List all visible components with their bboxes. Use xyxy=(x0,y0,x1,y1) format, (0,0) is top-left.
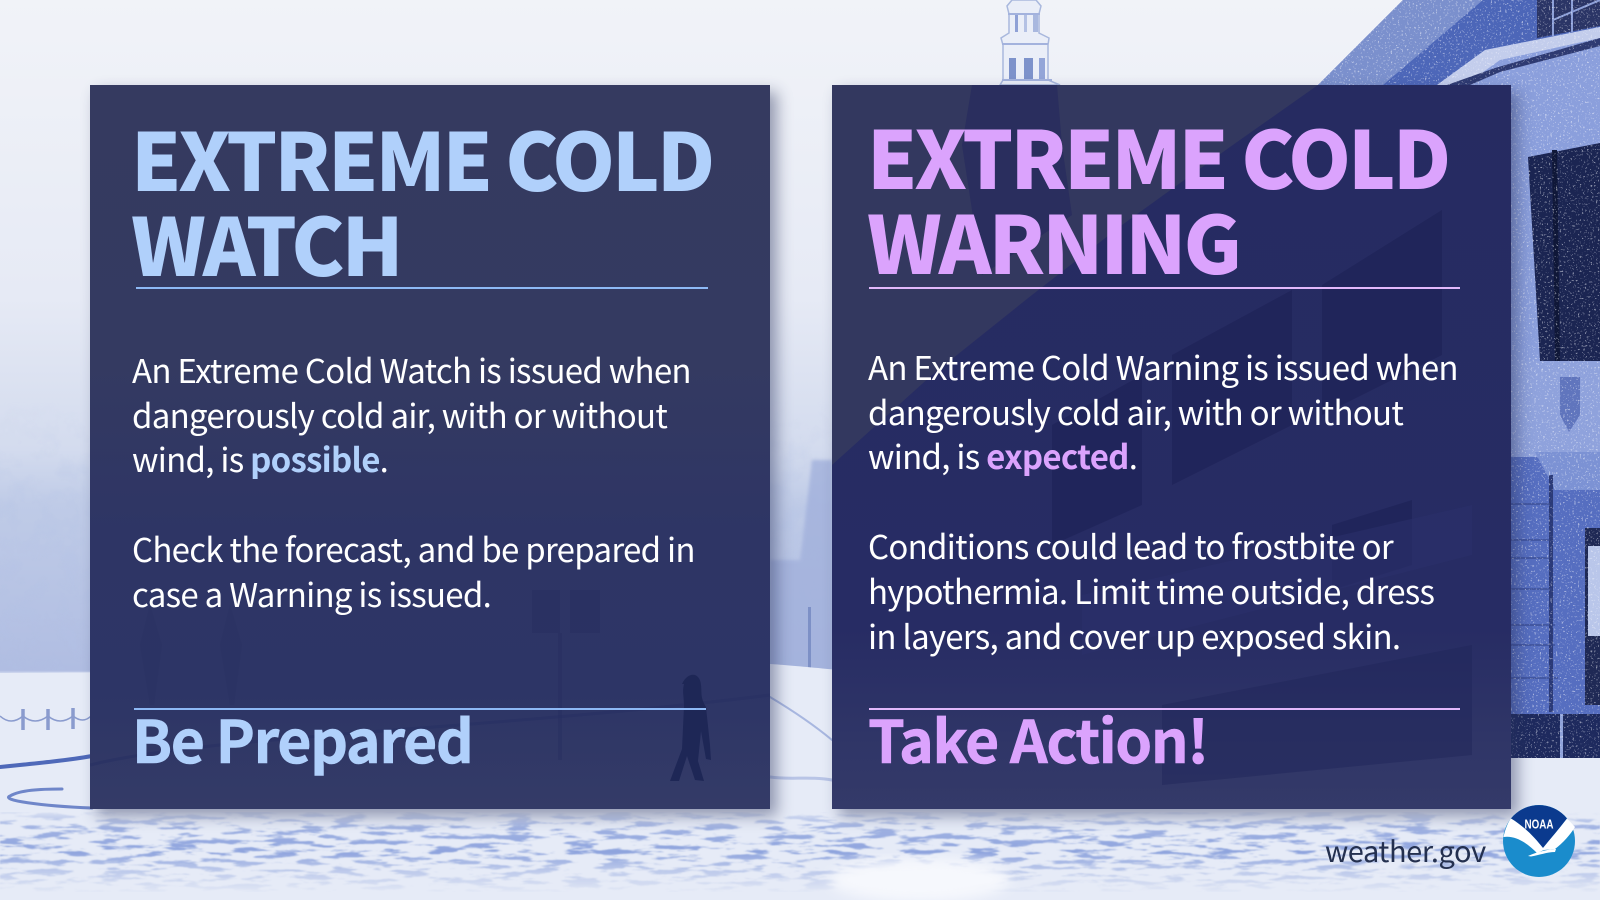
ledge block xyxy=(1511,361,1600,457)
warning footer rule xyxy=(869,708,1460,710)
ledge shadow xyxy=(1560,377,1580,432)
watch paragraph line 3: wind, is possible. xyxy=(132,434,388,482)
stone wall xyxy=(1437,27,1600,361)
warning paragraph line 3: wind, is expected. xyxy=(868,431,1137,479)
icon: NOAA logo: NOAA xyxy=(1524,817,1554,832)
panel: extreme cold warning xyxy=(832,85,1511,809)
watch call to action: Be Prepared xyxy=(132,695,472,780)
ghosted street scene with pedestrian xyxy=(670,675,711,781)
lower window glass xyxy=(1588,546,1600,636)
lower window xyxy=(1585,528,1600,705)
watch paragraph line 1: An Extreme Cold Watch is issued when xyxy=(132,344,691,392)
rough ground texture xyxy=(0,812,1600,892)
curved tire tracks xyxy=(0,697,832,808)
plinth xyxy=(1511,714,1600,758)
pilaster shadow xyxy=(1549,475,1553,712)
masonry lower wall xyxy=(1511,457,1600,714)
website label: weather.gov xyxy=(1325,829,1486,871)
warning call to action: Take Action! xyxy=(868,695,1208,780)
clock tower cupola xyxy=(1000,0,1060,85)
attic window xyxy=(1537,0,1600,38)
watch title xyxy=(131,99,712,300)
window frame xyxy=(1552,150,1560,361)
ghosted building seen through panel xyxy=(832,85,1472,785)
panel: extreme cold watch xyxy=(90,85,770,809)
warning advice line 2: hypothermia. Limit time outside, dress xyxy=(868,566,1434,614)
warning paragraph line 1: An Extreme Cold Warning is issued when xyxy=(868,342,1458,390)
watch paragraph line 2: dangerously cold air, with or without xyxy=(132,390,667,438)
watch title: WATCH xyxy=(131,184,401,300)
warning paragraph line 2: dangerously cold air, with or without xyxy=(868,387,1403,435)
building on the right xyxy=(1300,0,1600,760)
warning advice line 3: in layers, and cover up exposed skin. xyxy=(868,611,1400,659)
warning title rule xyxy=(869,287,1460,289)
distant fogged buildings between panels xyxy=(770,460,832,680)
warning title xyxy=(867,97,1448,298)
fence on the left xyxy=(0,708,91,730)
upper ledge xyxy=(1437,27,1600,85)
icon: NOAA logo xyxy=(1503,805,1575,877)
snowy ground band xyxy=(0,664,1600,900)
watch advice line 2: case a Warning is issued. xyxy=(132,569,491,617)
masonry joints xyxy=(1511,504,1558,678)
watch title: EXTREME COLD xyxy=(131,99,712,215)
ledge shadow line xyxy=(1447,38,1600,85)
watch footer rule xyxy=(134,708,706,710)
warning title: WARNING xyxy=(867,182,1239,298)
snow mound xyxy=(830,858,1010,900)
cornice overhang xyxy=(1535,452,1600,490)
watch advice line 1: Check the forecast, and be prepared in xyxy=(132,524,695,572)
warning title: EXTREME COLD xyxy=(867,97,1448,213)
snowfall specks xyxy=(1300,0,1600,760)
attic window mullions xyxy=(1553,0,1600,36)
large dark window xyxy=(1528,143,1600,361)
mottled fog xyxy=(0,400,1600,670)
watch title rule xyxy=(136,287,708,289)
street lamp pole xyxy=(808,607,811,675)
roof cornice xyxy=(1318,0,1483,85)
warning advice line 1: Conditions could lead to frostbite or xyxy=(868,521,1393,569)
